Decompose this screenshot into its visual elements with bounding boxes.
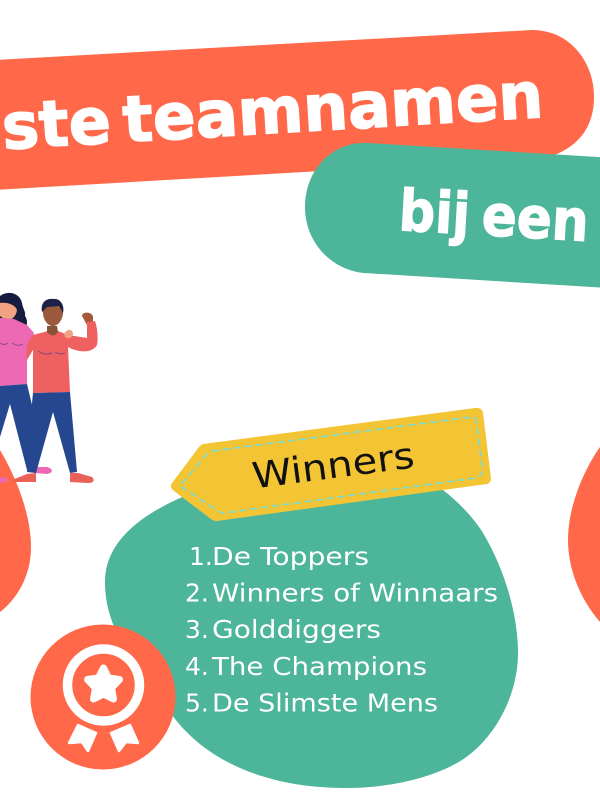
panel: left red blob — [0, 450, 31, 612]
panel: red title banner — [0, 30, 594, 192]
list item 5: 5. — [185, 688, 209, 718]
list item 3: 3. — [185, 615, 209, 644]
label text: Winners — [250, 435, 417, 497]
list item 3: Golddiggers — [212, 615, 381, 644]
panel: green title banner — [305, 143, 600, 290]
heading: title line one — [0, 59, 545, 168]
heading: title line two — [397, 178, 591, 255]
list item 1: De Toppers — [212, 542, 369, 571]
list item 2: 2. — [185, 578, 209, 608]
panel: right red blob — [568, 447, 600, 622]
heading: title line two: bij — [397, 178, 472, 248]
list item 1: 1. — [189, 542, 213, 571]
label: Winners tag — [171, 408, 491, 521]
panel: green list blob — [105, 477, 518, 788]
icon: award medal badge — [30, 624, 176, 770]
heading: title line two: een — [480, 183, 591, 255]
heading: title line one: teamnamen — [121, 59, 545, 158]
illustration: two people — [0, 293, 98, 483]
list item 4: The Champions — [211, 652, 427, 681]
person: man in coral — [12, 299, 98, 483]
list item 4: 4. — [185, 652, 209, 681]
list item 5: De Slimste Mens — [212, 688, 438, 718]
text block: team name list — [185, 542, 498, 718]
list item 2: Winners of Winnaars — [212, 578, 498, 608]
person: woman in pink — [0, 293, 52, 483]
